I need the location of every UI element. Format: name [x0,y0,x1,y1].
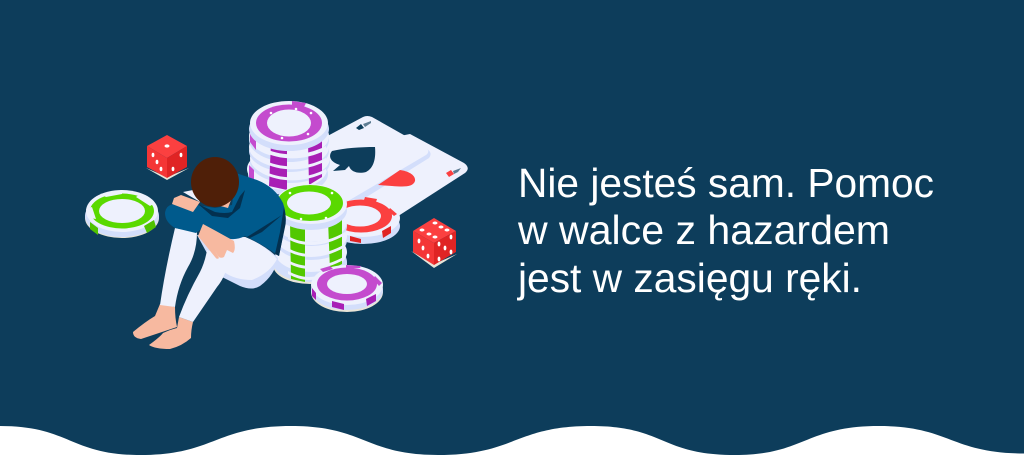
chip stack: purple [247,101,330,195]
chip stack: green [273,184,347,284]
left hand [172,195,200,212]
feet [133,304,177,339]
icon: spade on card [330,147,375,173]
icon: small heart [446,170,454,177]
die: left [146,135,189,180]
white gaps between stripes [262,146,326,158]
head hair [191,157,239,207]
torso shading [275,207,286,256]
die: right [411,218,457,268]
neck [205,187,236,208]
collar [183,190,200,202]
person sitting with head on arms [133,157,286,349]
icon: heart on card [378,170,415,186]
green stack stripes [290,223,305,282]
icon: small spade [356,124,364,130]
headline text [517,160,934,301]
headline text: w walce z hazardem [517,207,890,253]
headline text: Nie jesteś sam. Pomoc [518,160,934,206]
torso and arms [165,173,286,256]
hips shadow [197,235,278,288]
chip: green left [85,190,159,238]
hips [208,237,277,280]
playing cards [300,116,468,220]
chip: red [326,197,400,244]
headline text: jest w zasięgu ręki. [517,255,862,301]
right hand [198,224,235,259]
right leg [179,250,228,322]
chip: purple front [311,265,383,312]
illustration: gambler with chips, cards and dice [85,101,468,349]
purple stack stripes [269,143,287,190]
left leg [160,228,197,307]
